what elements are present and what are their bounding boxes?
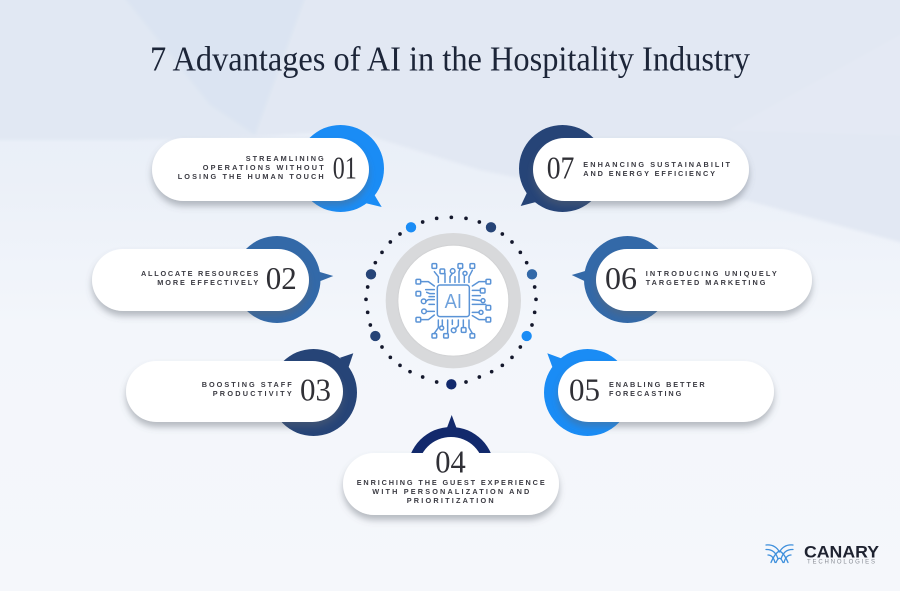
- speech ring 02: [234, 236, 333, 323]
- label 07: ENHANCING SUSTAINABILIT: [583, 160, 731, 169]
- label 01: STREAMLINING: [246, 154, 324, 163]
- logo subtitle: TECHNOLOGIES: [807, 560, 875, 566]
- label 02: MORE EFFECTIVELY: [157, 278, 258, 287]
- label 05: FORECASTING: [609, 389, 682, 398]
- speech ring 04: [408, 415, 494, 514]
- item 02: [92, 236, 333, 323]
- item 06: [572, 236, 812, 323]
- pill 05: [558, 361, 774, 422]
- label 01: OPERATIONS WITHOUT: [203, 163, 324, 172]
- label 07: AND ENERGY EFFICIENCY: [583, 169, 715, 178]
- item 03: [126, 349, 357, 436]
- label 04: WITH PERSONALIZATION AND: [372, 487, 529, 496]
- central AI graphic: [364, 215, 538, 389]
- speech ring 06: [572, 236, 671, 323]
- number 03: 03: [300, 372, 331, 408]
- label 05: [609, 380, 705, 398]
- title: 7 Advantages of AI in the Hospitality Industry: [150, 40, 750, 78]
- label 06: [646, 269, 777, 287]
- label 01: LOSING THE HUMAN TOUCH: [178, 172, 324, 181]
- logo wordmark: CANARY: [804, 542, 880, 561]
- label 04: PRIORITIZATION: [407, 496, 494, 505]
- speech ring 03: [270, 349, 357, 436]
- large ring dots: [366, 222, 537, 389]
- label 03: BOOSTING STAFF: [202, 380, 292, 389]
- number 06: 06: [605, 260, 637, 296]
- label 01: [178, 154, 324, 181]
- label 07: [583, 160, 731, 178]
- pill 07: [533, 138, 749, 201]
- label 04: [357, 478, 545, 505]
- chip label: AI: [445, 291, 462, 313]
- label 02: [141, 269, 258, 287]
- label 06: INTRODUCING UNIQUELY: [646, 269, 777, 278]
- item 07: [519, 125, 749, 212]
- icon: logo mark: [766, 545, 793, 562]
- speech ring 01: [297, 125, 384, 212]
- speech ring 05: [544, 349, 631, 436]
- pill 03: [126, 361, 343, 422]
- grey ring: [386, 233, 521, 368]
- label 06: TARGETED MARKETING: [646, 278, 766, 287]
- icon: AI chip: [416, 264, 491, 338]
- label 05: ENABLING BETTER: [609, 380, 705, 389]
- number 02: 02: [266, 260, 297, 296]
- pill 01: [152, 138, 369, 201]
- item 01: [152, 125, 384, 212]
- number 01: 01: [333, 149, 357, 185]
- label 03: PRODUCTIVITY: [213, 389, 292, 398]
- label 02: ALLOCATE RESOURCES: [141, 269, 258, 278]
- number 04: 04: [435, 444, 466, 480]
- item 05: [544, 349, 774, 436]
- white disc: [398, 246, 508, 356]
- dotted ring: [364, 215, 538, 384]
- speech ring 07: [519, 125, 606, 212]
- logo: [766, 542, 880, 566]
- label 04: ENRICHING THE GUEST EXPERIENCE: [357, 478, 545, 487]
- ring inner 04: [418, 437, 484, 503]
- item 04: [343, 415, 559, 515]
- number 05: 05: [569, 372, 600, 408]
- label 03: [202, 380, 292, 398]
- pill 06: [596, 249, 812, 311]
- number 07: 07: [547, 149, 574, 185]
- pill 04: [343, 453, 559, 515]
- pill 02: [92, 249, 309, 311]
